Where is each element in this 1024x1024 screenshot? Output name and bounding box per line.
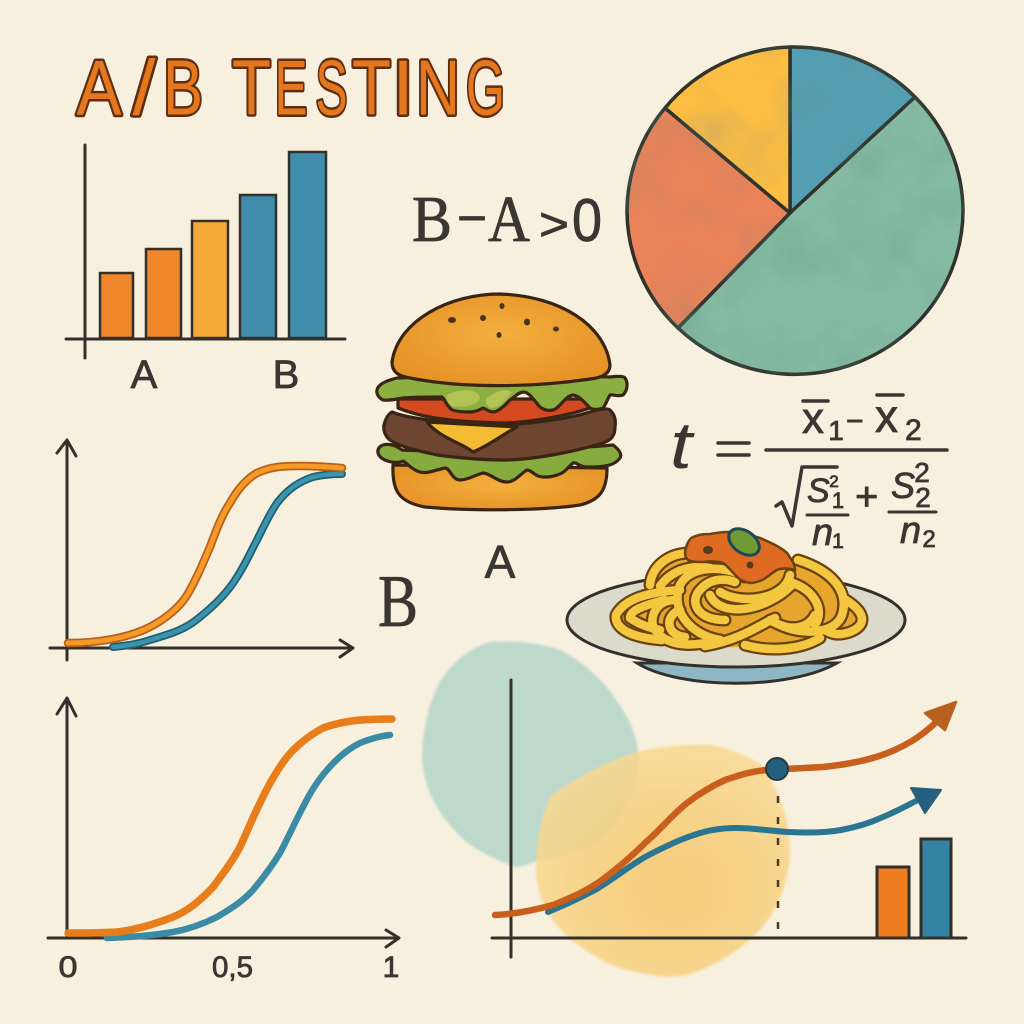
axes xyxy=(492,680,966,957)
green blob xyxy=(422,641,639,867)
S-curve chart 2: 0,5 xyxy=(212,951,253,984)
inequality text: > xyxy=(539,198,569,250)
curve A xyxy=(68,719,392,933)
t-test formula: 2 xyxy=(829,472,839,491)
top lettuce xyxy=(377,376,627,412)
title: G xyxy=(466,44,505,132)
equals sign xyxy=(718,443,749,455)
lettuce highlights xyxy=(447,390,512,408)
t-test formula: S xyxy=(891,465,915,506)
dashed marker xyxy=(777,796,779,938)
inequality text: A xyxy=(488,183,530,256)
curve B xyxy=(113,474,342,647)
t-test formula: 2 xyxy=(922,526,936,553)
title: T xyxy=(352,44,391,132)
t-test formula: 1 xyxy=(832,530,844,553)
t-test formula: n xyxy=(812,512,833,554)
plate xyxy=(567,573,905,667)
radical xyxy=(776,467,837,526)
sesame seeds xyxy=(448,303,559,338)
t-test formula: x xyxy=(875,390,898,442)
cheese xyxy=(427,422,517,452)
curve B xyxy=(107,735,390,938)
title: A xyxy=(76,44,122,132)
axes xyxy=(48,698,399,947)
t-test formula: + xyxy=(855,475,878,519)
inequality text: B xyxy=(412,183,452,256)
growth chart with watercolor blobs xyxy=(422,641,966,977)
basil leaf xyxy=(724,523,764,561)
t-test formula xyxy=(670,390,947,554)
t-test formula: 2 xyxy=(905,414,922,447)
t-test formula: n xyxy=(900,510,921,552)
S-curve chart 2 xyxy=(48,698,399,984)
burger illustration xyxy=(377,294,627,510)
tick labels: 0 xyxy=(58,951,78,984)
t-test formula: − xyxy=(846,405,864,438)
label B: B xyxy=(378,561,418,643)
slice: red xyxy=(627,108,790,328)
patty xyxy=(384,409,615,460)
orange bar xyxy=(877,867,909,938)
numerator: x xyxy=(802,394,824,443)
sauce xyxy=(685,532,795,583)
title: / xyxy=(132,44,156,132)
title: B xyxy=(163,44,203,132)
pie chart xyxy=(627,47,963,374)
title: S xyxy=(316,44,348,132)
label A: A xyxy=(485,536,516,588)
label B: B xyxy=(273,353,299,397)
curve A xyxy=(68,466,342,643)
title: I xyxy=(392,44,414,132)
bar chart: A vs B xyxy=(66,145,345,397)
slice: yellow xyxy=(665,47,790,213)
yellow blob xyxy=(536,745,790,977)
bars xyxy=(100,152,326,338)
t-test formula: 2 xyxy=(914,457,930,488)
noodle mass xyxy=(612,552,864,647)
label A: A xyxy=(131,353,158,397)
title: N xyxy=(416,44,460,132)
top bun xyxy=(392,294,610,386)
t-test formula: 1 xyxy=(832,488,844,513)
blue bar xyxy=(921,839,951,938)
slice: green xyxy=(678,97,963,374)
radicand terms: S xyxy=(807,472,830,510)
numerator bars and fraction line xyxy=(766,395,947,450)
slice: blue xyxy=(790,47,915,213)
blue trend arrow xyxy=(548,800,918,912)
orange trend arrow xyxy=(495,715,943,915)
t symbol: t xyxy=(670,408,695,482)
fraction bars in radicand xyxy=(807,512,936,515)
noodles xyxy=(616,553,862,649)
axes xyxy=(66,145,345,358)
title: T xyxy=(232,44,271,132)
S-curve chart 2: 1 xyxy=(383,951,399,984)
plate base xyxy=(637,663,837,683)
inequality text: 0 xyxy=(572,187,602,254)
S-curve chart 1 xyxy=(50,440,353,660)
inequality text xyxy=(412,183,602,256)
data point xyxy=(766,758,788,780)
axes xyxy=(50,440,353,660)
title: E xyxy=(274,44,308,132)
bottom bun xyxy=(393,465,607,510)
title xyxy=(76,44,505,132)
sauce specks xyxy=(703,546,754,568)
bottom lettuce xyxy=(378,444,621,482)
tomato xyxy=(398,399,590,423)
pasta illustration xyxy=(567,523,905,683)
t-test formula: 1 xyxy=(828,415,844,446)
inequality text: − xyxy=(457,190,487,246)
t-test formula: 2 xyxy=(915,482,931,513)
